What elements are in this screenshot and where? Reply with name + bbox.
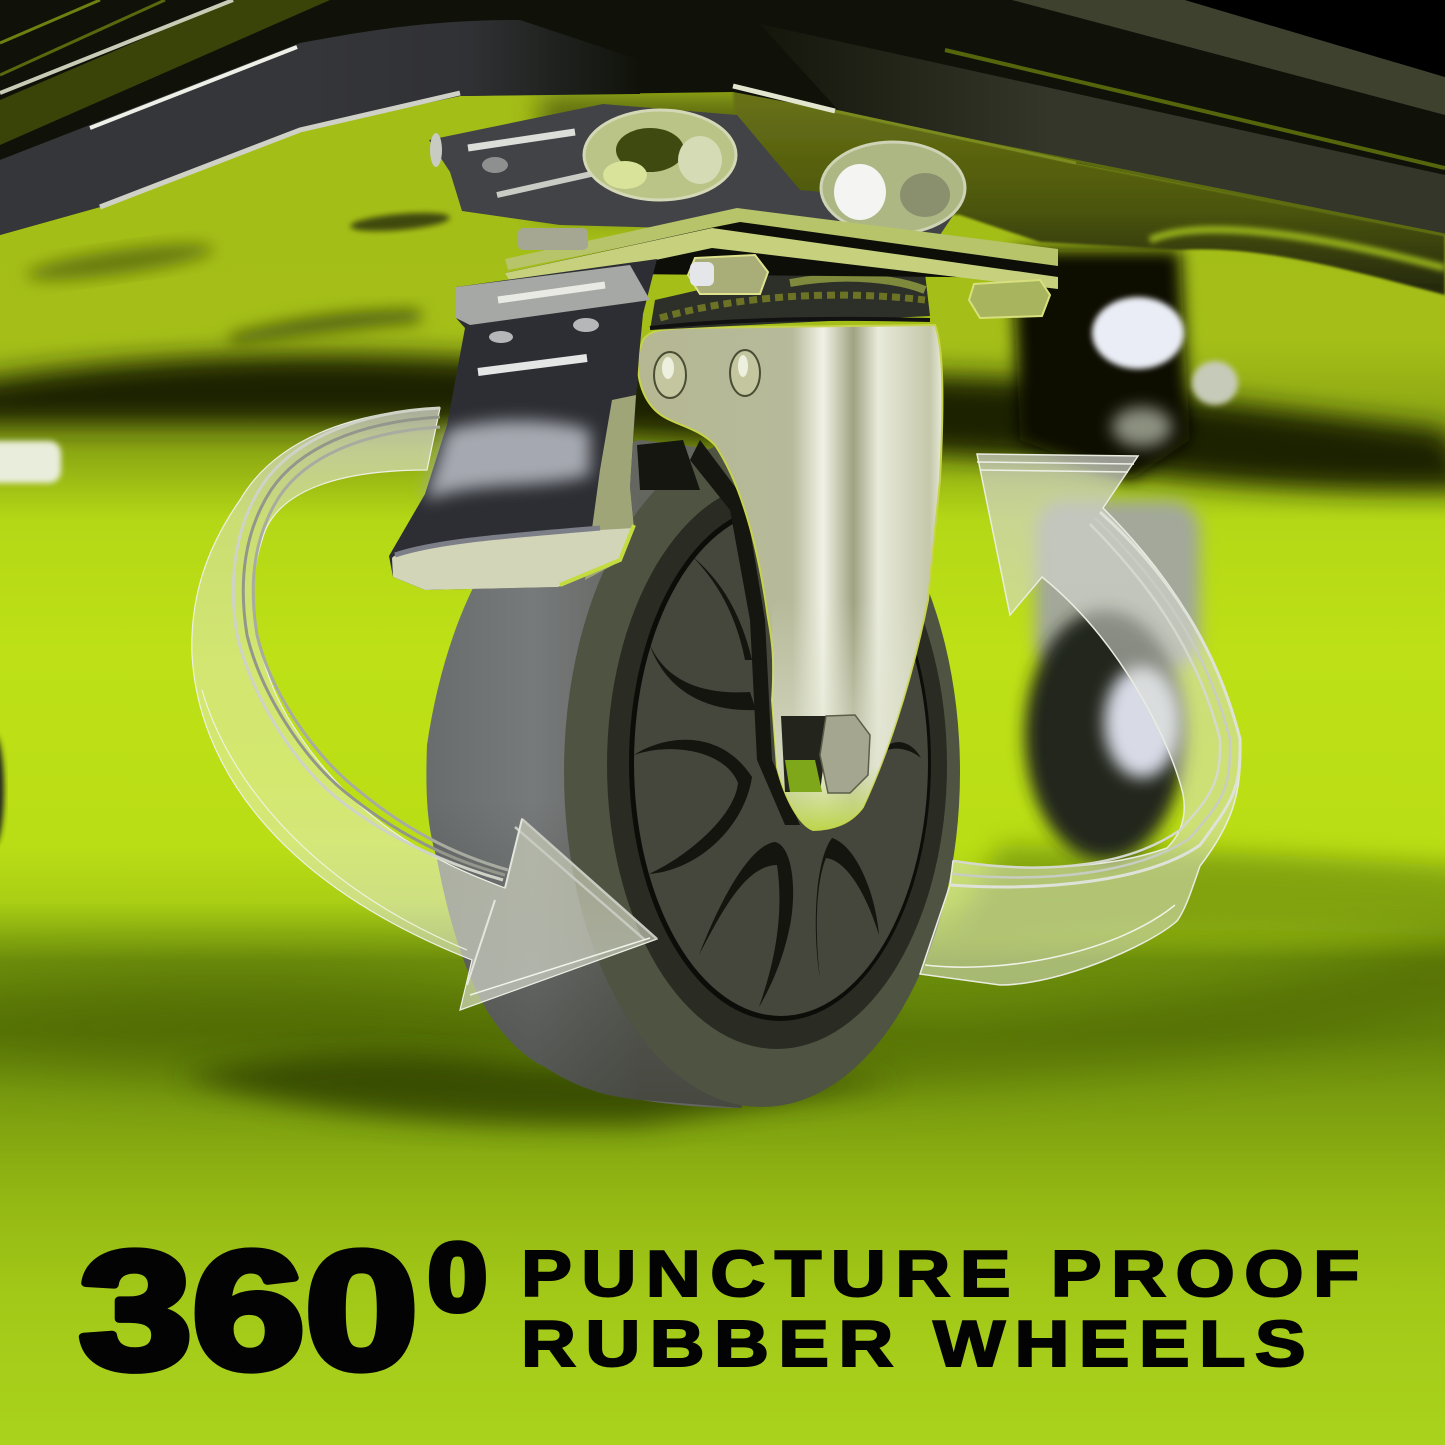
lever bottom lip [392,528,634,590]
tread [426,440,800,1108]
grey side band [0,20,640,235]
top bolts [584,110,965,234]
brake lever [389,259,657,590]
tagline: puncture proof rubber wheels: PUNCTURE PROOF [521,1237,1369,1310]
hub face [634,510,928,1016]
swivel bearing [650,273,930,330]
headline: 360 degrees: 0 [428,1224,487,1331]
arrow ridge lines [233,408,503,880]
top mounting bracket [429,104,960,235]
axle bolt [781,715,870,793]
rivets [654,350,760,398]
mounting plates [505,208,1058,290]
rotation arrow: left [192,408,657,1010]
right bands [1012,0,1445,115]
hub black outline [629,505,931,1021]
platform underside [733,90,1445,295]
lever emboss marks [478,358,587,372]
lever metallic sheen [425,421,590,500]
hub spokes [634,556,921,1007]
background shadows [0,95,1445,1125]
dark notch and strip beside fork [637,440,800,825]
blurred rear caster [1012,250,1238,860]
blurred left caster fragments [0,441,61,845]
caster fork [638,325,942,830]
lever right edge [585,395,636,580]
tagline: puncture proof rubber wheels: RUBBER WHEELS [521,1307,1315,1380]
headline: 360 degrees: 360 [79,1218,418,1404]
olive side rim [564,437,960,1107]
rotation arrow: right rear band [920,454,1241,985]
dark hub band [607,481,947,1049]
lever top lip [456,265,650,325]
headline: 360 degrees [79,1218,487,1404]
mounting nuts [518,228,1050,318]
top dark platform [0,0,1445,268]
left olive reflection [0,0,330,145]
wheel [426,437,960,1108]
tagline: puncture proof rubber wheels [521,1237,1369,1380]
bright edge highlight [733,86,835,111]
